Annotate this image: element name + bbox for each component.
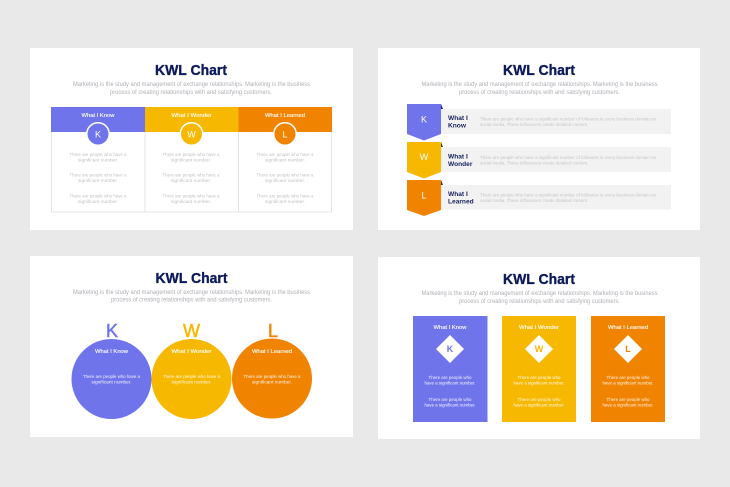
- card: what I wonder: What I Wonder: [519, 325, 559, 331]
- column: what I wonder: W: [187, 130, 196, 140]
- card: what I wonder: have a significant number.: [514, 402, 564, 408]
- column: what I know: There are people who have a: [70, 194, 127, 200]
- circle: what I wonder: W: [183, 321, 200, 341]
- column: what I learned: There are people who have a: [256, 172, 314, 178]
- row: what I learned: What I: [448, 191, 468, 198]
- panel: cards layout: [378, 257, 700, 439]
- title: KWL Chart: [156, 270, 228, 287]
- card: what I learned: L: [625, 344, 631, 354]
- subtitle: [73, 289, 310, 304]
- circle: what I know: significant number.: [92, 380, 132, 386]
- column: what I wonder: There are people who have a: [162, 172, 220, 178]
- circle: what I learned: What I Learned: [252, 349, 292, 355]
- title: KWL Chart: [503, 62, 575, 79]
- card: what I know: There are people who: [428, 375, 472, 381]
- row: what I know: social media. These influencers create detailed content.: [480, 122, 588, 128]
- card: what I know: What I Know: [434, 325, 467, 331]
- card: what I know: have a significant number.: [424, 380, 476, 386]
- card: what I learned: [591, 316, 665, 422]
- row: what I learned: There are people who have a significant number of followers in every business domain on: [480, 192, 656, 198]
- card: what I wonder: W: [535, 344, 544, 354]
- column: what I learned: significant number.: [265, 158, 305, 164]
- row: what I wonder: W: [420, 152, 429, 162]
- subtitle: Marketing is the study and management of exchange relationships. Marketing is the business: [422, 290, 658, 297]
- column: what I know: significant number.: [78, 178, 118, 184]
- row: what I wonder: Wonder: [448, 161, 473, 168]
- card: what I know: [413, 316, 488, 422]
- circle: what I know: [72, 321, 152, 419]
- subtitle: process of creating relationships with and satisfying customers.: [110, 89, 272, 96]
- column: what I wonder: significant number.: [171, 158, 211, 164]
- panel: circles layout: [30, 256, 353, 437]
- column: what I wonder: There are people who have a: [162, 152, 220, 158]
- subtitle: Marketing is the study and management of exchange relationships. Marketing is the business: [73, 81, 310, 88]
- card: what I wonder: have a significant number.: [514, 380, 564, 386]
- card: what I learned: have a significant number.: [602, 402, 654, 408]
- circle: what I wonder: significant number.: [172, 380, 212, 386]
- card: what I learned: There are people who: [606, 397, 650, 403]
- card: what I wonder: There are people who: [518, 397, 561, 403]
- card: what I know: K: [447, 344, 454, 354]
- card: what I wonder: There are people who: [518, 375, 561, 381]
- column: what I learned: There are people who have a: [256, 152, 314, 158]
- subtitle: [422, 81, 658, 96]
- card: what I know: have a significant number.: [424, 402, 476, 408]
- circle: what I know: What I Know: [95, 349, 128, 355]
- panel: table layout: [30, 48, 353, 230]
- row: what I learned: Learned: [448, 198, 474, 206]
- title: KWL Chart: [155, 62, 227, 79]
- subtitle: [422, 290, 658, 305]
- column: what I know: What I Know: [82, 113, 115, 119]
- subtitle: process of creating relationships with and satisfying customers.: [459, 298, 620, 305]
- circle: what I wonder: [152, 321, 232, 419]
- row: what I know: Know: [448, 122, 467, 130]
- title: KWL Chart: [503, 271, 575, 288]
- row: what I learned: L: [421, 190, 427, 200]
- table grid: [52, 132, 332, 212]
- column: what I wonder: There are people who have a: [162, 194, 220, 200]
- column: what I wonder: [145, 107, 238, 205]
- card: what I learned: What I Learned: [608, 325, 648, 331]
- row: what I know: There are people who have a significant number of followers in every business domain on: [480, 116, 656, 122]
- column: what I wonder: significant number.: [171, 199, 211, 205]
- column: what I learned: significant number.: [265, 199, 305, 205]
- row: what I learned: [407, 180, 671, 216]
- column: what I learned: What I Learned: [265, 113, 305, 119]
- circle: what I learned: There are people who have a: [244, 374, 301, 380]
- circle: what I wonder: What I Wonder: [172, 349, 212, 355]
- card: what I know: There are people who: [428, 397, 472, 403]
- row: what I know: What I: [448, 115, 468, 122]
- subtitle: process of creating relationships with and satisfying customers.: [111, 296, 272, 304]
- circle: what I learned: L: [268, 321, 278, 341]
- column: what I know: There are people who have a: [70, 172, 127, 178]
- panel: ribbon rows layout: [378, 48, 700, 230]
- subtitle: process of creating relationships with and satisfying customers.: [459, 89, 620, 96]
- row: what I know: [407, 104, 671, 140]
- card: what I learned: have a significant number.: [602, 380, 654, 386]
- circle: what I know: There are people who have a: [83, 374, 140, 380]
- row: what I know: K: [421, 114, 427, 124]
- circle: what I know: K: [106, 321, 118, 341]
- column: what I learned: significant number.: [265, 178, 305, 184]
- column: what I know: significant number.: [78, 199, 118, 205]
- subtitle: [73, 81, 310, 96]
- column: what I learned: There are people who have a: [256, 194, 314, 200]
- circle: what I learned: [232, 321, 312, 418]
- card: what I wonder: [502, 316, 576, 422]
- column: what I know: significant number.: [78, 158, 118, 164]
- circle: what I learned: significant number.: [252, 380, 292, 386]
- card: what I learned: There are people who: [606, 375, 650, 381]
- row: what I learned: social media. These influencers create detailed content.: [480, 198, 588, 204]
- column: what I know: [51, 107, 145, 205]
- row: what I wonder: What I: [448, 154, 468, 160]
- subtitle: Marketing is the study and management of exchange relationships. Marketing is the business: [422, 81, 658, 88]
- column: what I know: There are people who have a: [70, 152, 127, 158]
- row: what I wonder: There are people who have a significant number of followers in every business domain on: [480, 155, 656, 161]
- column: what I wonder: What I Wonder: [172, 113, 212, 119]
- column: what I wonder: significant number.: [171, 178, 211, 184]
- row: what I wonder: social media. These influencers create detailed content.: [480, 160, 588, 166]
- column: what I learned: [238, 107, 332, 205]
- circle: what I wonder: There are people who have a: [163, 374, 220, 380]
- row: what I wonder: [407, 142, 671, 178]
- column: what I learned: L: [282, 130, 288, 140]
- subtitle: Marketing is the study and management of exchange relationships. Marketing is the business: [73, 289, 310, 296]
- column: what I know: K: [95, 130, 101, 140]
